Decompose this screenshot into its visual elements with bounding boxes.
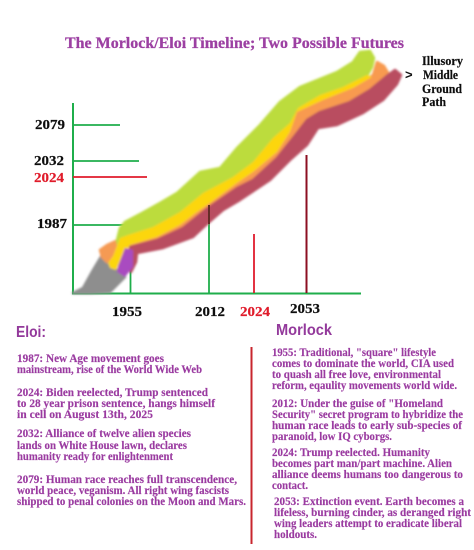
Morlock 2012 entry xyxy=(272,396,464,443)
x axis year labels: 2053 xyxy=(290,301,320,316)
Eloi 2024 entry: to 28 year prison sentence, hangs himself xyxy=(17,396,216,410)
heading: Eloi: Eloi: xyxy=(16,324,46,341)
Morlock 2012 entry: 2012: Under the guise of "Homeland xyxy=(272,396,443,410)
Eloi 2079 entry: world peace, veganism. All right wing fascists xyxy=(17,483,229,497)
title: The Morlock/Eloi Timeline; Two Possible Futures xyxy=(65,35,404,52)
x axis year labels: 2024 xyxy=(240,304,270,319)
Morlock 2053 entry: holdouts. xyxy=(274,527,317,541)
horizontal year markers xyxy=(73,125,155,225)
Eloi 2024 entry: in cell on August 13th, 2025 xyxy=(17,407,153,421)
maroon Morlock band xyxy=(130,70,401,272)
Eloi 2079 entry: shipped to penal colonies on the Moon and Mars. xyxy=(17,494,246,508)
Eloi 1987 entry xyxy=(17,351,202,376)
green Eloi band xyxy=(117,51,374,252)
yellow band xyxy=(108,75,372,270)
Eloi 1987 entry: mainstream, rise of the World Wide Web xyxy=(17,362,202,376)
Eloi 2079 entry: 2079: Human race reaches full transcendence, xyxy=(17,472,237,486)
Morlock 1955 entry: 1955: Traditional, "square" lifestyle xyxy=(272,345,437,359)
label: Illusory Middle Ground Path: Illusory xyxy=(422,53,463,68)
early orange path xyxy=(100,240,122,262)
label: Illusory Middle Ground Path: Middle xyxy=(423,67,458,82)
Morlock 2024 entry: 2024: Trump reelected. Humanity xyxy=(272,445,430,459)
x axis year labels: 2012 xyxy=(195,304,225,319)
panel: Morlock events xyxy=(272,345,471,541)
x axis year labels xyxy=(112,301,320,319)
Morlock 1955 entry: comes to dominate the world, CIA used xyxy=(272,356,454,370)
y axis year labels xyxy=(34,117,67,231)
y axis year labels: 2024 xyxy=(34,170,64,185)
Morlock 1955 entry: to quash all free love, environmental xyxy=(272,367,442,381)
vertical year markers xyxy=(130,155,306,293)
Morlock 2024 entry xyxy=(272,445,463,492)
label: Illusory Middle Ground Path: Ground xyxy=(422,81,463,96)
purple transition patch xyxy=(117,248,133,277)
timeline ribbon xyxy=(73,51,401,293)
Eloi 1987 entry: 1987: New Age movement goes xyxy=(17,351,164,365)
Morlock 2024 entry: becomes part man/part machine. Alien xyxy=(272,456,452,470)
label: Illusory Middle Ground Path xyxy=(422,53,463,109)
Morlock 2024 entry: alliance deems humans too dangerous to xyxy=(272,467,463,481)
y axis year labels: 1987 xyxy=(37,216,67,231)
y axis year labels: 2079 xyxy=(35,117,65,132)
Morlock 1955 entry: reform, eqaulity movements world wide. xyxy=(272,378,457,392)
heading: Morlock: Morlock xyxy=(276,322,332,339)
Eloi 2024 entry: 2024: Biden reelected, Trump sentenced xyxy=(17,385,208,399)
chart axes xyxy=(73,103,361,294)
Morlock 2053 entry xyxy=(274,494,471,541)
Morlock 2024 entry: contact. xyxy=(272,478,308,492)
Morlock 2012 entry: human race leads to early sub-species of xyxy=(272,418,463,432)
panel: Eloi events xyxy=(17,351,246,508)
arrow pointer: > xyxy=(405,67,413,82)
Morlock 2053 entry: 2053: Extinction event. Earth becomes a xyxy=(274,494,464,508)
x axis year labels: 1955 xyxy=(112,304,142,319)
Eloi 2032 entry: lands on White House lawn, declares xyxy=(17,438,187,452)
Eloi 2024 entry xyxy=(17,385,216,421)
y axis year labels: 2032 xyxy=(34,153,64,168)
Eloi 2032 entry: 2032: Alliance of twelve alien species xyxy=(17,426,191,440)
Morlock 2012 entry: paranoid, low IQ cyborgs. xyxy=(272,429,392,443)
Eloi 2032 entry xyxy=(17,426,191,463)
orange band behind yellow xyxy=(128,62,390,250)
Eloi 2032 entry: humanity ready for enlightenment xyxy=(17,449,173,463)
marker overlap on ribbon xyxy=(208,205,210,224)
Morlock 1955 entry xyxy=(272,345,457,392)
label: Illusory Middle Ground Path: Path xyxy=(422,94,447,109)
gray early human path xyxy=(73,255,125,293)
Eloi 2079 entry xyxy=(17,472,246,508)
divider between columns xyxy=(250,347,252,544)
